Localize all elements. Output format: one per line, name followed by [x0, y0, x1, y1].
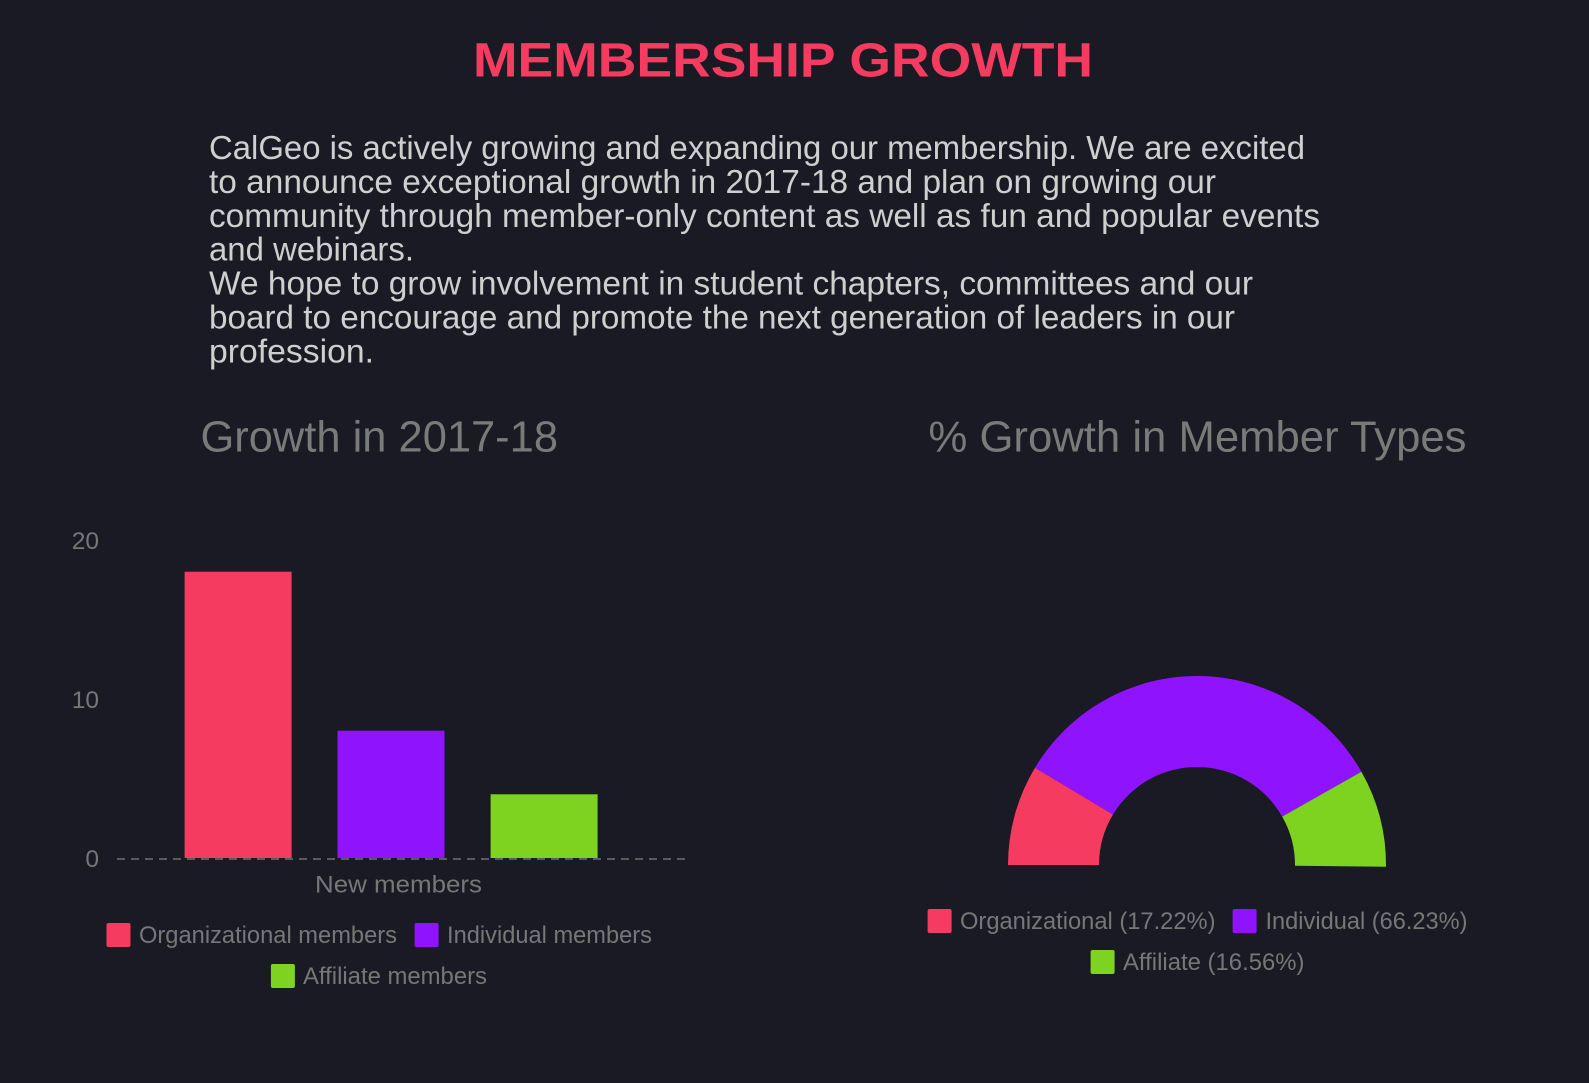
intro text block: and webinars.	[209, 231, 414, 268]
panel: bar chart growth in 2017-18	[72, 413, 685, 990]
y axis labels: 0	[85, 846, 99, 873]
intro text block: We hope to grow involvement in student chapters, committees and our	[209, 265, 1253, 302]
y axis labels	[72, 528, 99, 873]
half donut	[1008, 676, 1386, 867]
x axis label: New members	[315, 872, 482, 899]
donut legend	[928, 908, 1468, 976]
donut legend: Affiliate (16.56%)	[1123, 949, 1304, 976]
donut legend: Individual (66.23%)	[1266, 908, 1468, 935]
bar chart legend	[106, 922, 652, 990]
bar chart legend: Affiliate members	[303, 963, 487, 990]
intro text block: to announce exceptional growth in 2017-18 and plan on growing our	[209, 163, 1216, 200]
intro text block: board to encourage and promote the next generation of leaders in our	[209, 298, 1235, 336]
intro text block: community through member-only content as well as fun and popular events	[209, 197, 1320, 234]
title: MEMBERSHIP GROWTH	[473, 35, 1093, 88]
panel: half donut chart member types	[928, 413, 1468, 976]
y axis labels: 10	[72, 687, 99, 714]
intro text block: CalGeo is actively growing and expanding our membership. We are excited	[209, 129, 1305, 166]
bar chart heading: Growth in 2017-18	[200, 413, 558, 462]
donut chart heading: % Growth in Member Types	[928, 413, 1466, 462]
bars	[185, 572, 598, 858]
intro text block: profession.	[209, 332, 374, 369]
bar chart legend: Organizational members	[139, 922, 397, 949]
donut legend: Organizational (17.22%)	[960, 908, 1216, 935]
bar chart legend: Individual members	[447, 922, 652, 949]
y axis labels: 20	[72, 528, 99, 555]
intro text block	[209, 129, 1320, 369]
